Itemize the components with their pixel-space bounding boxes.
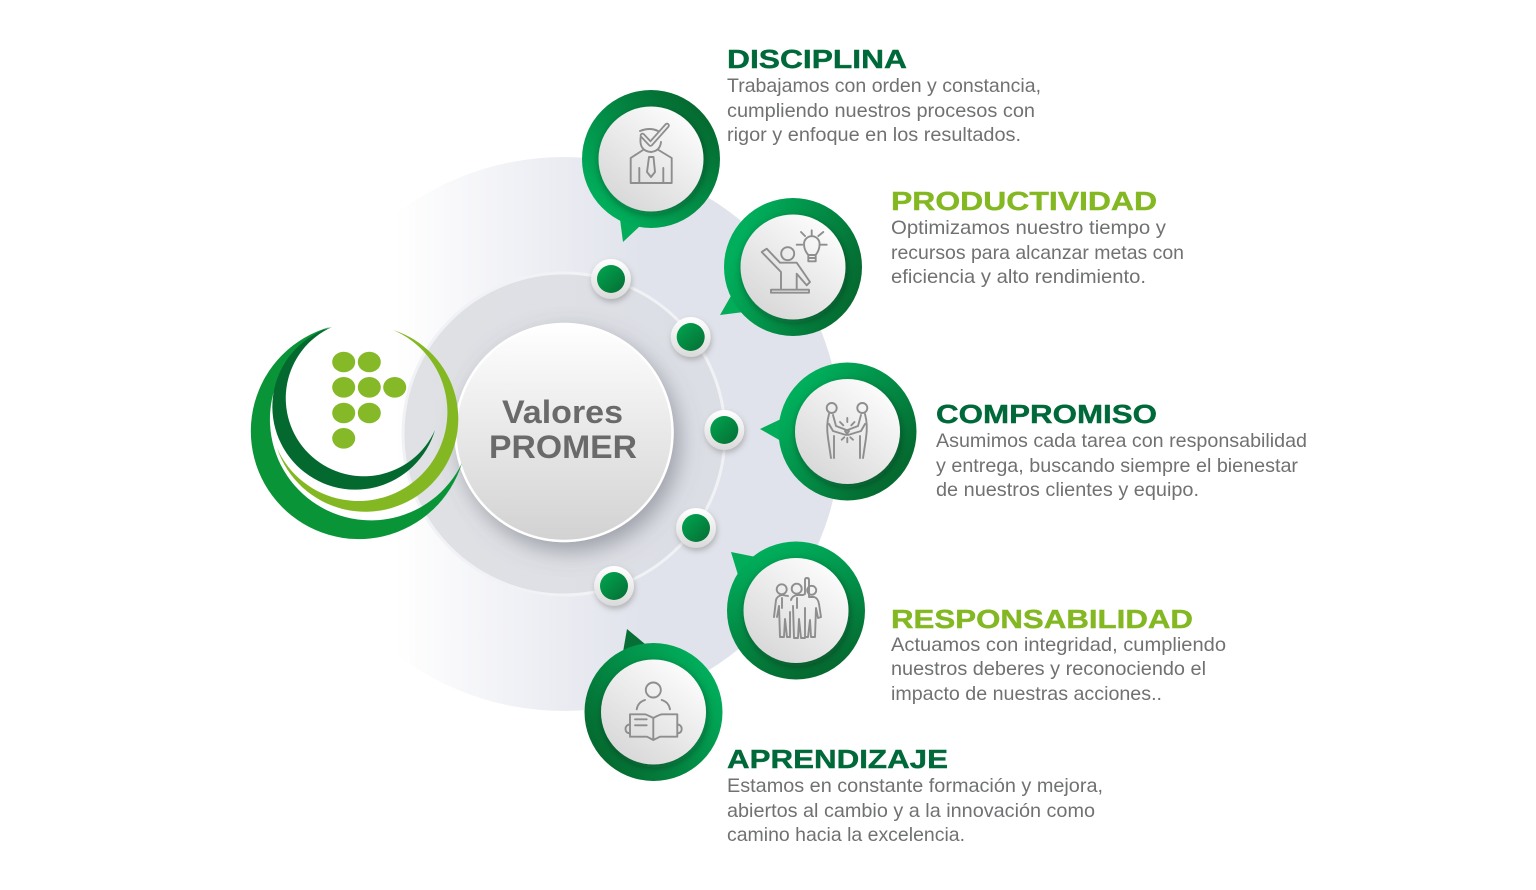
logo F dots	[332, 352, 406, 449]
text: disciplina: DISCIPLINA	[727, 44, 907, 74]
text: disciplina: Trabajamos con orden y constancia,	[727, 75, 1041, 97]
text: productividad	[891, 186, 1184, 288]
text: compromiso: COMPROMISO	[936, 399, 1157, 429]
text: productividad: eficiencia y alto rendimiento.	[891, 266, 1146, 288]
text: compromiso	[936, 399, 1307, 501]
background large circle	[287, 157, 841, 711]
connector nodes	[591, 259, 744, 606]
callout: productividad	[720, 198, 862, 336]
logo outer green crescent	[251, 327, 462, 539]
icon: person with check	[631, 126, 672, 183]
text: aprendizaje: APRENDIZAJE	[727, 744, 948, 774]
central title: Valores	[502, 394, 623, 430]
text: aprendizaje: camino hacia la excelencia.	[727, 824, 965, 846]
central title	[489, 394, 637, 465]
text: compromiso: Asumimos cada tarea con responsabilidad	[936, 430, 1307, 452]
text: aprendizaje: Estamos en constante formación y mejora,	[727, 775, 1103, 797]
text: productividad: Optimizamos nuestro tiempo y	[891, 217, 1166, 239]
logo PROMER	[251, 327, 462, 539]
text: responsabilidad: impacto de nuestras acciones..	[891, 683, 1162, 705]
text: disciplina	[727, 44, 1041, 146]
text: aprendizaje	[727, 744, 1103, 846]
central circle	[456, 324, 672, 541]
callout: disciplina	[582, 90, 720, 242]
text: responsabilidad: Actuamos con integridad, cumpliendo	[891, 634, 1226, 656]
logo lime crescent	[277, 330, 458, 512]
text: compromiso: y entrega, buscando siempre el bienestar	[936, 455, 1299, 477]
text: productividad: recursos para alcanzar metas con	[891, 242, 1184, 264]
logo dark green crescent	[272, 327, 435, 490]
text: responsabilidad: nuestros deberes y reconociendo el	[891, 658, 1206, 680]
middle ring	[403, 273, 725, 595]
callout: compromiso	[760, 362, 916, 500]
text: productividad: PRODUCTIVIDAD	[891, 186, 1157, 216]
icon: person reading	[626, 682, 682, 740]
text: responsabilidad: RESPONSABILIDAD	[891, 604, 1193, 634]
text: disciplina: cumpliendo nuestros procesos con	[727, 100, 1035, 122]
icon: team of three	[774, 578, 821, 638]
text: responsabilidad	[891, 604, 1226, 705]
icon: person with lightbulb	[762, 230, 827, 293]
central title: PROMER	[489, 429, 637, 465]
callout: aprendizaje	[584, 629, 722, 781]
text: disciplina: rigor y enfoque en los resultados.	[727, 124, 1021, 146]
text: compromiso: de nuestros clientes y equipo.	[936, 479, 1199, 501]
callout: responsabilidad	[727, 542, 865, 680]
text: aprendizaje: abiertos al cambio y a la innovación como	[727, 800, 1095, 822]
icon: handshake	[827, 403, 867, 458]
